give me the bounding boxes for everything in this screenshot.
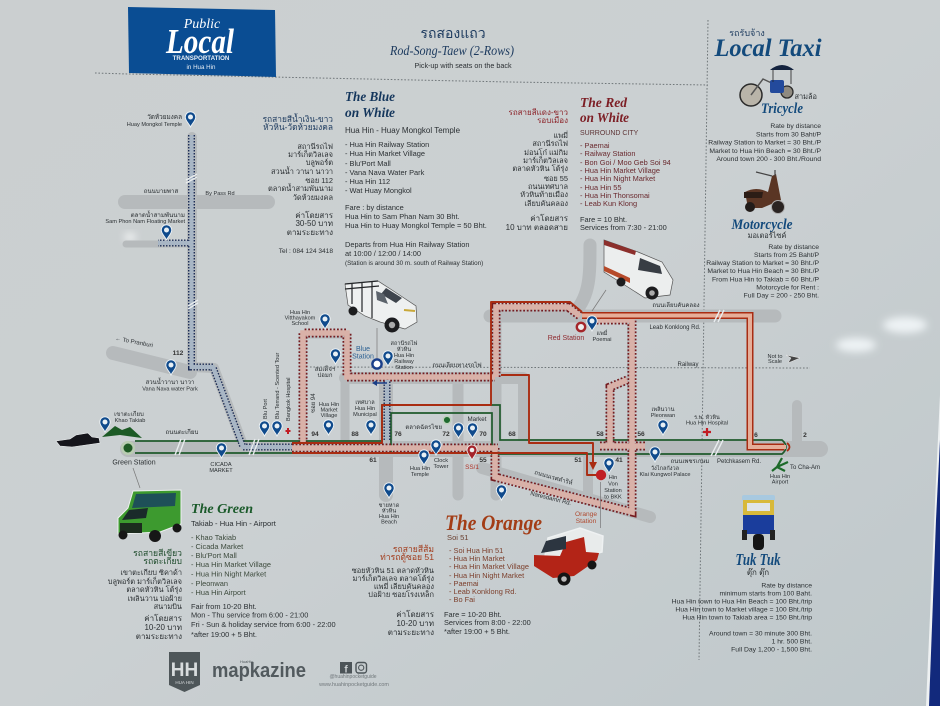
title banner: in Hua Hin [187,64,216,71]
social links [318,662,389,688]
text: tuk tuk rates: Around town = 30 minute 300 Bht. [709,630,812,638]
label: market green stop [405,416,451,431]
label: Leab Konklong: Leab Konklong Rd. [649,325,701,331]
label: Khao Takiab: Khao Takiab [115,418,145,424]
label: Hua Hin Vitthayakom School [285,310,330,329]
panel: blue route Thai text: ตลาดน้ำสามพันนาม [268,183,333,193]
label: Bangkok Hospital: Bangkok Hospital [286,377,292,421]
label: airport [770,458,820,486]
label: Hua Hin Railway Station: Hua Hin [394,353,414,359]
panel: The Blue on White: - Hua Hin Market Village [345,149,425,158]
compass: not to scale: Scale [768,359,782,365]
text: motorcycle rates [706,244,819,300]
label: Hua Hin Beach: ชายหาด [379,502,400,509]
title banner [128,7,276,77]
panel: red route Thai text: ม่อนโก๋ แม่กิม [524,148,568,157]
label: Orange Station: Orange [575,511,597,518]
panel: The Orange: The Orange [445,510,542,535]
road numbers: 6 [754,432,758,439]
orange route [292,302,790,475]
panel: The Blue on White: (Station is around 30 m. south of Railway Station) [345,260,483,267]
panel: red route Thai text: มาร์เก็ตวิลเลจ [523,155,568,165]
panel: The Green: - Hua Hin Airport [191,588,246,597]
label: shrine: สมเด็จฯ [315,364,335,373]
text: tricycle rates: Railway Station to Market = 30 Bht./P [708,140,821,146]
panel: The Red on White: - Railway Station [580,149,635,158]
label: market pins: Market [468,416,487,423]
panel: The Orange: - Soi Hua Hin 51 [449,546,503,555]
compass: not to scale: Not to [768,354,782,360]
panel: The Green: Mon - Thu service from 6:00 - 21:00 [191,610,308,620]
text: motorcycle rates: Motorcycle for Rent : [756,284,819,292]
road numbers: 41 [615,457,623,464]
label: Hua Hin Temple: Hua Hin [410,466,430,472]
panel: The Orange: Soi 51 [447,533,469,542]
panel: blue route Thai text: หัวหิน-วัดห้วยมงคล [263,122,333,132]
heading: Rod-Song-Taew: รถสองแถว [420,25,486,41]
label: Hua Hin Market Village [319,402,339,435]
panel: green route Thai text: ตลาดหัวหิน โต้รุ่ง [126,585,182,594]
road numbers: 58 [596,431,604,438]
icon: tricycle [740,65,794,106]
panel: The Red on White: - Bon Goi / Moo Geb Soi 94 [580,158,671,167]
panel: green route Thai text: เขาตะเกียบ ซิคาด้า [120,568,182,577]
label: Green Station [112,441,156,488]
label: By Pass Rd: By Pass Rd [205,191,235,197]
logo: Hua Hin shield: HH [171,660,198,681]
panel: green route Thai text [108,548,183,641]
label: Hua Hin Vitthayakom School: Vitthayakom [285,316,316,322]
label: Hua Hin Railway Station [383,340,418,371]
panel: The Orange: - Hua Hin Market [449,554,505,563]
label: Hua Hin Beach [379,483,400,526]
panel: The Orange: Fare = 10-20 Bht. [444,610,502,619]
number: 112: 112 [173,350,184,357]
panel: The Green: Fair from 10-20 Bht. [191,602,257,611]
label: Hin Von Station [604,458,622,500]
panel: blue route Thai text: วัดห้วยมงคล [293,193,333,202]
panel: red route Thai text: ตลาดหัวหิน โต้รุ่ง [512,164,568,173]
red on white route [292,307,645,512]
text: motorcycle rates: Starts from 25 Baht/P [754,252,819,259]
label: Orange Station: Station [576,518,597,525]
label: Hua Hin Temple: Temple [411,472,429,478]
label: Huay Mongkol Temple: วัดห้วยมงคล [147,113,182,121]
label: Hua Hin Beach: หัวหิน [382,508,396,514]
panel: The Blue on White: Hua Hin - Huay Mongkol Temple [345,126,461,135]
panel: The Green: - Khao Takiab [191,533,236,542]
road numbers: 94 [311,431,319,438]
label: Hua Hin Hospital: Hua Hin Hospital [686,420,728,426]
label: Huay Mongkol Temple [127,112,196,128]
label: Blu Terrace: Blu Terrand - Scented Tour [275,353,281,419]
label: Hin Von Station: Station [604,488,622,494]
label: Motorcycle [731,217,793,240]
label: Cicada Market [209,443,233,474]
panel: blue route Thai text [263,113,334,255]
label: Tuk Tuk: ตุ๊ก ตุ๊ก [747,567,769,577]
label: Tuk Tuk: Tuk Tuk [736,550,781,569]
label: Green Station: Green Station [112,460,156,466]
panel: red route Thai text [506,108,569,232]
panel: The Orange: - Leab Konklong Rd. [449,587,516,596]
text: tricycle rates: Rate by distance [770,123,821,130]
label: Huay Mongkol Temple: Huay Mongkol Temple [127,122,182,128]
compass: not to scale [768,354,800,365]
panel: blue route Thai text: 30-50 บาท [295,219,333,228]
label: Red Station [548,290,606,342]
label: Blue Station: Station [352,354,374,360]
label: Tricycle [761,92,817,117]
panel: The Green: *after 19:00 + 5 Bht. [191,630,257,639]
panel: orange route Thai text: ท่ารถตู้ซอย 51 [380,552,434,563]
vehicle: green truck [118,490,182,542]
panel: orange route Thai text [352,544,435,637]
road numbers: 68 [508,431,516,438]
panel: The Orange [444,510,542,636]
road numbers: 56 [637,431,645,438]
panel: The Red on White: - Hua Hin Thonsomai [580,191,650,200]
label: Hua Hin Railway Station: สถานีรถไฟ [391,340,418,347]
panel: The Green: The Green [191,502,253,517]
panel: green route Thai text: รถสายสีเขียว [133,548,182,558]
label: Poemai: แพมี่ [597,329,608,337]
panel: The Red on White: Services from 7:30 - 21:00 [580,223,667,232]
label: Hua Hin Hospital: ร.พ. หัวหิน [694,414,720,421]
label: Hin Von Station: to BKK [604,494,622,500]
label: market green stop: ตลาดฉัตรไชย [405,423,442,431]
label: Tricycle: Tricycle [761,101,803,117]
panel: The Blue on White: - Blu'Port Mall [345,159,391,168]
label: Poemai [587,316,611,343]
label: Hua Hin Railway Station: Railway [394,359,414,365]
label: Hua Hin Market Village: Hua Hin [319,402,339,408]
logo: Hua Hin shield: HUA HIN [175,680,194,685]
panel: red route Thai text: รถสายสีแดง-ขาว [509,108,568,117]
label: Cicada Market: MARKET [209,468,233,474]
label: Hua Hin Municipal: Hua Hin [355,406,375,412]
panel: The Green: Fri - Sun & holiday service from 6:00 - 22:00 [191,620,336,629]
label: To Pranburi: ← To Pranburi [115,336,153,349]
panel: blue route Thai text: มาร์เก็ตวิลเลจ [288,149,333,159]
label: Blu Port [259,399,270,436]
panel: orange route Thai text: มาร์เก็ตวิลเลจ ตลาดโต้รุ่ง [352,573,434,583]
panel: blue route Thai text: บลูพอร์ต [306,158,333,167]
panel: red route Thai text: ถนนเทศบาล [528,182,568,191]
pin: south [496,485,507,500]
heading: Local Taxi: Local Taxi [714,35,822,62]
label: Red Station: Red Station [548,335,584,342]
label: Pleonwan: เพลินวาน [652,406,675,413]
text: tuk tuk rates: minimum starts from 100 Baht. [719,590,812,598]
vehicle: blue on white pickup [345,281,417,332]
label: SS/1: SS/1 [465,464,479,471]
panel: red route Thai text: หัวหินท้ายเมือง [520,190,568,199]
label: Sam Phon Nam Floating Market [105,210,185,240]
title banner: Local [165,22,234,61]
text: motorcycle rates: Market to Hua Hin Beach = 30 Bht./P [707,268,819,275]
panel: The Orange: - Paemai [449,579,479,588]
panel: The Blue on White: on White [345,106,395,121]
road numbers: 88 [351,431,359,438]
label: By Pass Rd: ถนนบายพาส [144,188,178,195]
panel: The Blue on White: - Hua Hin 112 [345,177,390,186]
panel: The Blue on White: The Blue [345,90,395,105]
panel: The Orange: - Hua Hin Night Market [449,571,524,580]
label: Poemai: Poemai [593,337,611,343]
label: Clock tower: Tower [434,464,449,470]
text: tuk tuk rates: Hua Hin town to Hua Hin Beach = 100 Bht./trip [672,598,812,606]
label: Pleonwan [651,406,675,435]
label: Railway: Railway [677,362,699,368]
vehicle: red on white pickup [604,240,673,300]
label: Petchkasem Rd [671,458,761,465]
panel: The Red on White [580,96,671,232]
label: Naresdamri Rd [530,468,574,507]
label: Naresdamri Rd: Naresdamri Rd. [530,491,572,507]
road network [113,137,820,517]
panel: The Red on White: The Red [580,96,628,111]
road numbers: 61 [369,457,377,464]
road numbers: 55 [479,457,487,464]
panel: The Blue on White: - Vana Nava Water Park [345,168,425,177]
panel: red route Thai text: รอบเมือง [537,116,568,125]
road break marks [175,174,724,456]
label: Hua Hin Municipal: Municipal [353,412,377,418]
label: Hua Hin Railway Station: หัวหิน [397,346,411,353]
panel: The Green: - Pleonwan [191,579,228,588]
panel: red route Thai text: แพมี่ [553,130,568,140]
label: Clock tower [431,440,449,470]
panel: The Blue on White [345,90,487,267]
panel: The Red on White: Fare = 10 Bht. [580,215,627,224]
panel: red route Thai text: 10 บาท ตลอดสาย [506,223,568,232]
panel: green route Thai text: 10-20 บาท [144,623,182,632]
text: motorcycle rates: From Hua Hin to Takiab = 60 Bht./P [712,276,819,284]
panel: orange route Thai text: รถสายสีส้ม [393,544,434,554]
panel: The Blue on White: Fare : by distance [345,203,404,212]
text: motorcycle rates: Railway Station to Market = 30 Bht./P [706,260,819,267]
label: Hua Hin Hospital [686,414,728,436]
panel: The Green: - Cicada Market [191,542,243,551]
label: Sam Phon Nam Floating Market: Sam Phon Nam Floating Market [105,219,185,225]
label: Hua Hin Market Village: Village [321,413,337,419]
text: motorcycle rates: Rate by distance [768,244,819,251]
heading: Rod-Song-Taew: Pick-up with seats on the back [414,61,512,70]
text: tuk tuk rates: 1 hr. 500 Bht. [772,638,812,646]
title banner: TRANSPORTATION [173,55,230,62]
text: tricycle rates: Around town 200 - 300 Bht./Round [716,156,821,163]
label: Blu Port: Blu Port [263,399,269,419]
label: Hin Von Station: Hin [609,475,617,481]
label: Klai Kangwol Palace: Klai Kungwol Palace [640,472,690,478]
label: Klai Kangwol Palace [640,447,690,478]
heading: Rod-Song-Taew [389,25,514,70]
panel: blue route Thai text: ตามระยะทาง [287,228,333,237]
label: Hua Hin Municipal [353,399,377,435]
panel: The Blue on White: - Wat Huay Mongkol [345,186,412,195]
panel: The Red on White: - Hua Hin Night Market [580,174,655,183]
panel: The Blue on White: Hua Hin to Huay Mongkol Temple = 50 Bht. [345,221,487,230]
panel: green route Thai text: บลูพอร์ต มาร์เก็ตวิลเลจ [108,576,182,586]
label: Petchkasem Rd: Petchkasem Rd. [717,459,761,465]
text: motorcycle rates: Full Day = 200 - 250 Bht. [744,292,819,300]
panel: The Green: - Blu'Port Mall [191,551,237,560]
panel: green route Thai text: รถตะเกียบ [143,556,182,566]
panel: The Red on White: - Paemai [580,141,610,150]
logo: mapkazine: HuaHin [240,659,253,664]
panel: The Blue on White: - Hua Hin Railway Station [345,140,429,149]
panel: red route Thai text: เลียบคันคลอง [524,199,568,208]
label: Pleonwan: Pleonwan [651,413,675,419]
label: SS/1 [465,445,479,471]
panel: The Green: Takiab - Hua Hin - Airport [191,519,277,528]
icon: motorcycle [744,170,784,214]
label: Naresdamri Rd: ถนนนเรศดำริห์ [533,468,574,487]
text: tricycle rates: Starts from 30 Baht/P [756,132,821,138]
panel: blue route Thai text: สถานีรถไฟ [297,142,333,151]
label: Vana Nava water park: Vana Nava water Park [142,386,198,392]
label: Cicada Market: CICADA [210,462,232,468]
blue on white route [158,135,387,447]
panel: orange route Thai text: ซอยหัวหิน 51 ตลาดหัวหิน [352,566,434,575]
text: tricycle rates: Market to Hua Hin Beach = 30 Bht./P [709,148,821,155]
label: Sam Phon Nam Floating Market: ตลาดน้ำสามพันนาม [131,210,185,219]
label: Hua Hin Beach: Beach [381,520,397,526]
panel: red route Thai text: ซอย 55 [544,174,568,183]
label: Blue Station [352,328,382,369]
panel: The Orange: - Hua Hin Market Village [449,562,529,571]
label: Hua Hin Temple [410,450,430,478]
label: Takiab road: ถนนตะเกียบ [166,428,199,436]
panel: green route Thai text: เพลินวาน บ่อฝ้าย [128,594,182,603]
icon: boat [56,433,100,447]
label: Vana Nava water park [142,360,198,392]
label: Vana Nava water park: สวนน้ำวานา นาวา [146,376,194,386]
panel: The Blue on White: Departs from Hua Hin Railway Station [345,240,469,249]
panel: orange route Thai text: 10-20 บาท [396,619,434,628]
title banner: Public [183,17,221,32]
panel: red route Thai text: สถานีรถไฟ [532,139,568,148]
road numbers: 2 [803,432,807,439]
heading: Local Taxi: รถรับจ้าง [729,28,765,38]
label: Orange Station [575,470,606,528]
label: By Pass Rd [144,188,235,197]
panel: orange route Thai text: ค่าโดยสาร [396,609,435,619]
panel: The Red on White: - Leab Kun Klong [580,199,637,208]
panel: green route Thai text: ตามระยะทาง [136,632,182,641]
road numbers [311,431,807,464]
panel: The Orange: Services from 8:00 - 22:00 [444,618,531,627]
label: Tricycle: สามล้อ [794,92,817,101]
label: airport: Airport [772,480,789,486]
label: railway road: ถนนเลียบทางรถไฟ [432,361,482,369]
panel: red route Thai text: ค่าโดยสาร [530,213,569,223]
panel: orange route Thai text: บ่อฝ้าย ซอยโรงเหล็ก [368,589,434,599]
panel: The Red on White: on White [580,111,629,126]
label: Tuk Tuk [736,550,781,577]
label: Klai Kangwol Palace: วังไกลกังวล [651,465,679,472]
logo: Hua Hin shield [169,652,200,692]
panel: The Orange: - Bo Fai [449,595,475,604]
label: Petchkasem Rd: ถนนเพชรเกษม [671,458,709,465]
label: Blue Station: Blue [356,346,370,353]
panel: The Blue on White: at 10:00 / 12:00 / 14:00 [345,249,421,258]
text: tuk tuk rates: Full Day 1,200 - 1,500 Bht. [731,646,812,654]
social links: f [344,664,348,676]
label: Hua Hin Vitthayakom School: School [291,321,309,327]
panel: green route Thai text: ค่าโดยสาร [144,613,183,623]
label: Blu Terrace [272,353,282,436]
label: Hua Hin Municipal: เทศบาล [355,399,375,406]
label: shrine: ปอมก [318,372,333,379]
panel: blue route Thai text: รถสายสีน้ำเงิน-ขาว [263,113,333,124]
vehicle: orange truck [534,528,603,586]
label: Motorcycle: มอเตอร์ไซค์ [748,231,786,240]
text: tuk tuk rates [672,582,812,654]
label: airport: Hua Hin [770,474,790,480]
panel: The Blue on White: Hua Hin to Sam Phan Nam 30 Bht. [345,212,460,221]
text: tuk tuk rates: Rate by distance [761,582,812,590]
label: shrine [315,349,341,379]
panel: orange route Thai text: ตามระยะทาง [388,628,434,637]
panel: The Orange: *after 19:00 + 5 Bht. [444,627,510,636]
panel: blue route Thai text: ค่าโดยสาร [295,210,334,220]
label: Leab Konklong: ถนนเลียบคันคลอง [652,301,700,309]
text: tricycle rates [708,123,821,163]
panel: The Green [191,502,336,639]
logo: mapkazine: mapkazine [212,660,306,682]
panel: The Green: - Hua Hin Market Village [191,560,271,569]
panel: The Red on White: - Hua Hin 55 [580,183,622,192]
panel: blue route Thai text: สวนน้ำ วานา นาวา [271,166,333,176]
label: Hua Hin Market Village: Market [320,408,338,414]
route map [56,112,820,528]
label: Motorcycle: Motorcycle [731,217,793,233]
label: Hin Von Station: Von [608,482,618,488]
label: Clock tower: Clock [434,458,448,464]
panel: blue route Thai text: Tel : 084 124 3418 [279,248,333,255]
label: airport: To Cha-Am [790,465,820,471]
label: Khao Takiab: เขาตะเกียบ [114,410,144,418]
social links: @huahinpocketguide [329,674,377,680]
green route [135,405,786,454]
road numbers: 72 [442,431,450,438]
label: Hua Hin Vitthayakom School: Hua Hin [290,310,310,316]
vehicle: tuk tuk [742,495,775,550]
road numbers: 51 [574,457,582,464]
social links: www.huahinpocketguide.com [318,682,389,688]
panel: The Red on White: - Hua Hin Market Village [580,166,660,175]
label: Hua Hin Railway Station: Station [395,365,413,371]
panel: The Green: - Hua Hin Night Market [191,570,266,578]
label: Leab Konklong [649,301,701,331]
panel: blue route Thai text: ซอย 112 [305,176,333,185]
panel: green route Thai text: สนามบิน [154,602,182,611]
heading: Rod-Song-Taew: Rod-Song-Taew (2-Rows) [389,44,514,59]
text: tuk tuk rates: Hua Hin town to Takiab area = 150 Bht./trip [682,614,812,622]
panel: The Red on White: SURROUND CITY [580,130,639,137]
road numbers: 76 [394,431,402,438]
panel: orange route Thai text: แพมี่ เลียบคันคลอง [374,581,434,591]
label: market pins [453,416,487,438]
label: soi 94 rotated: ซอย 94 [310,393,317,413]
road numbers: 70 [479,431,487,438]
text: tuk tuk rates: Hua Hin town to Market village = 100 Bht./trip [675,606,812,614]
label: Khao Takiab [100,410,145,438]
label: Hua Hin Beach: Hua Hin [379,514,399,520]
